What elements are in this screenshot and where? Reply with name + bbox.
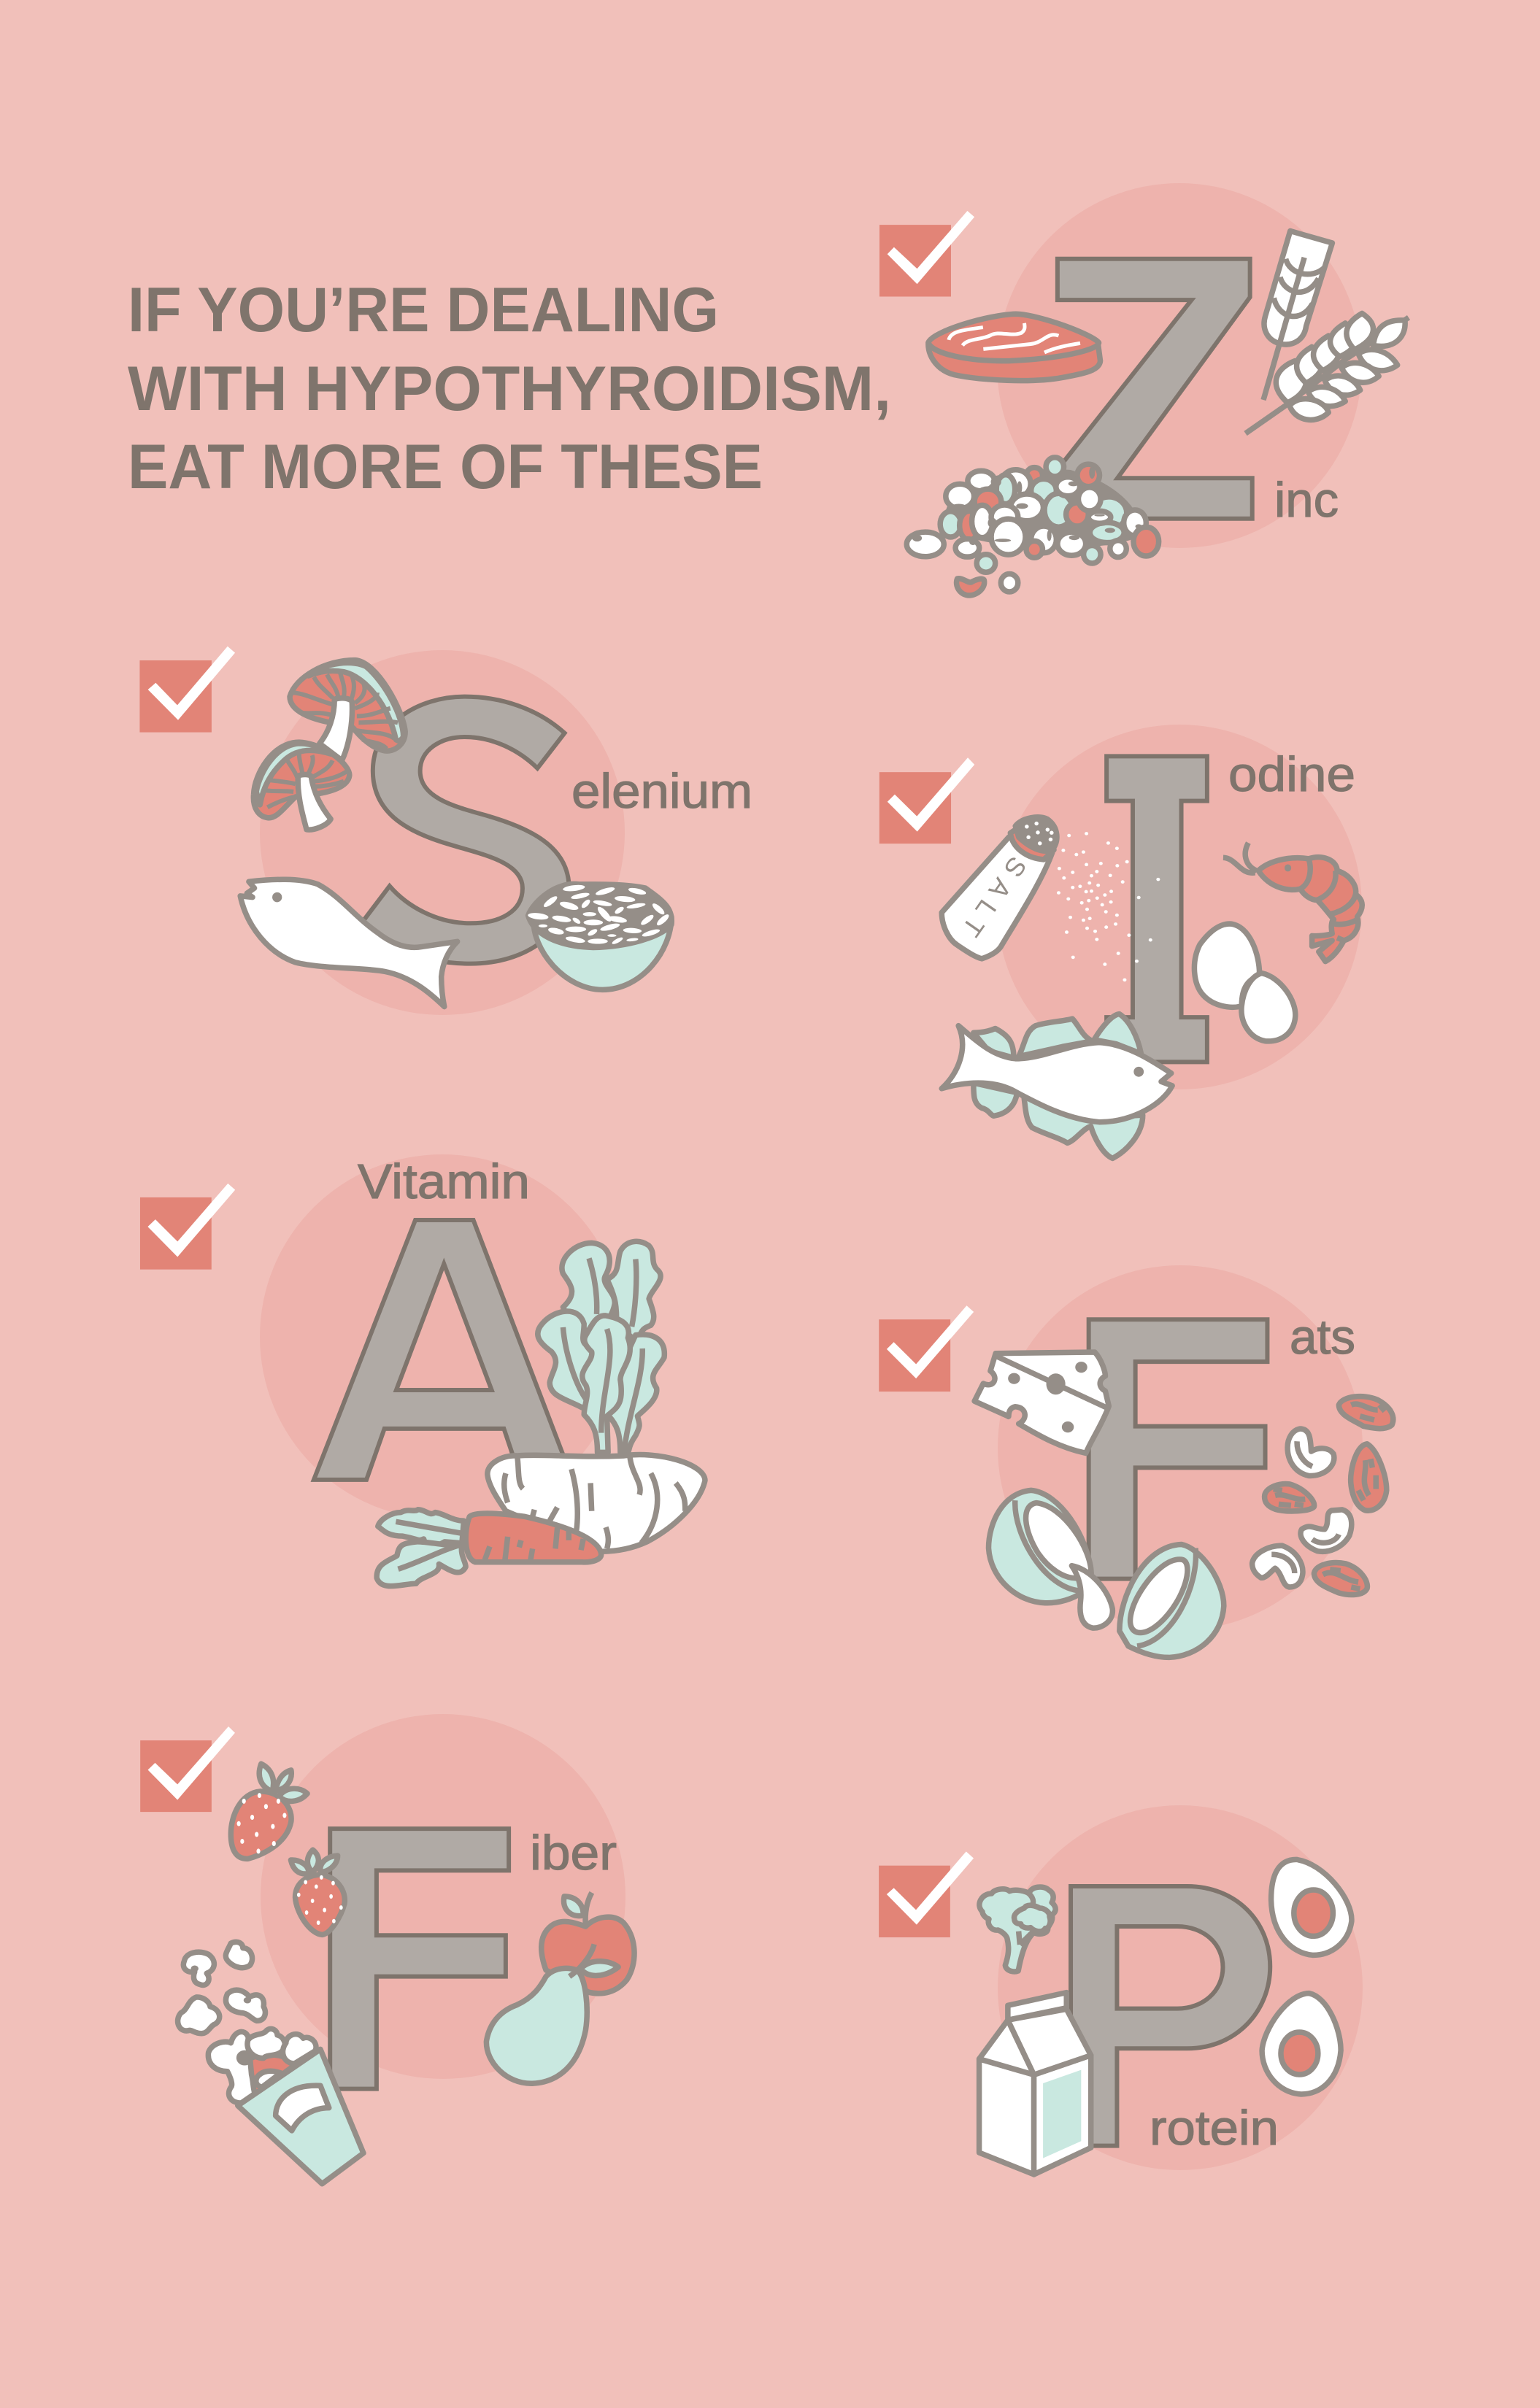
icon: fish [240,879,458,1007]
salt grains [1025,822,1160,981]
icon: pear [486,1944,618,2083]
label: iber: iber [530,1826,617,1880]
icon: salt shaker [942,817,1057,959]
panel: selenium [139,647,752,1015]
icon: cashews [1252,1429,1352,1587]
icon: fish with fins [942,1014,1172,1158]
checkbox [879,757,974,844]
title: EAT MORE OF THESE [128,432,763,502]
icon: popcorn cup [208,2029,363,2184]
letter I [1106,756,1207,1062]
bean notches [912,466,1142,545]
title: WITH HYPOTHYROIDISM, [128,354,891,424]
checkbox [140,1184,235,1270]
checkbox [140,1726,235,1812]
checkbox [879,1305,974,1392]
label: ats: ats [1290,1310,1355,1365]
icon: wheat upright [1263,231,1332,400]
icon: small strawberry [290,1850,344,1934]
icon: large strawberry [231,1764,307,1859]
icon: broccoli [979,1887,1055,1972]
icon: cheese [974,1352,1109,1453]
icon: milk carton [979,1993,1091,2174]
icon: leafy greens [538,1241,664,1452]
checkbox [879,211,974,296]
icon: carrot [377,1510,601,1586]
letter F [1089,1319,1267,1579]
icon: egg top [1271,1859,1352,1955]
label: elenium: elenium [571,764,752,819]
icon: egg bottom [1262,1994,1341,2094]
panel: iodine [879,725,1362,1158]
icon: coconut milk [1071,1566,1112,1628]
icon: apple [542,1893,634,1994]
title: IF YOU’RE DEALING [128,275,719,345]
panel: zinc [879,183,1409,595]
letter F [330,1829,509,2089]
icon: wheat diagonal [1246,313,1409,433]
label: inc: inc [1274,473,1339,528]
icon: large mushroom [290,660,405,760]
label: rotein: rotein [1150,2101,1279,2156]
icon: small mushroom [253,742,350,830]
icon: turnip [488,1455,705,1551]
panel: fats [879,1265,1393,1657]
letter P [1071,1886,1270,2146]
icon: coconut left [988,1490,1091,1603]
letter S [363,697,569,964]
panel: protein [879,1805,1363,2174]
letter A [314,1220,573,1480]
icon: coconut right [1120,1544,1224,1657]
checkbox [879,1851,974,1937]
icon: almonds [1265,1397,1393,1595]
checkbox [139,647,235,733]
icon: shrimp [1223,843,1362,962]
title [128,275,891,502]
letter Z [1047,259,1252,519]
label: odine: odine [1228,747,1355,802]
salt label: SALT [952,852,1033,949]
panel: fiber [140,1714,634,2184]
icon: beans pile [906,458,1159,595]
icon: eggs [1194,924,1295,1041]
panel: vitamin A [140,1154,705,1586]
icon: steak [928,314,1101,381]
icon: loose popcorn [178,1942,265,2034]
icon: rice bowl [527,884,671,989]
label: Vitamin: Vitamin [358,1154,530,1209]
